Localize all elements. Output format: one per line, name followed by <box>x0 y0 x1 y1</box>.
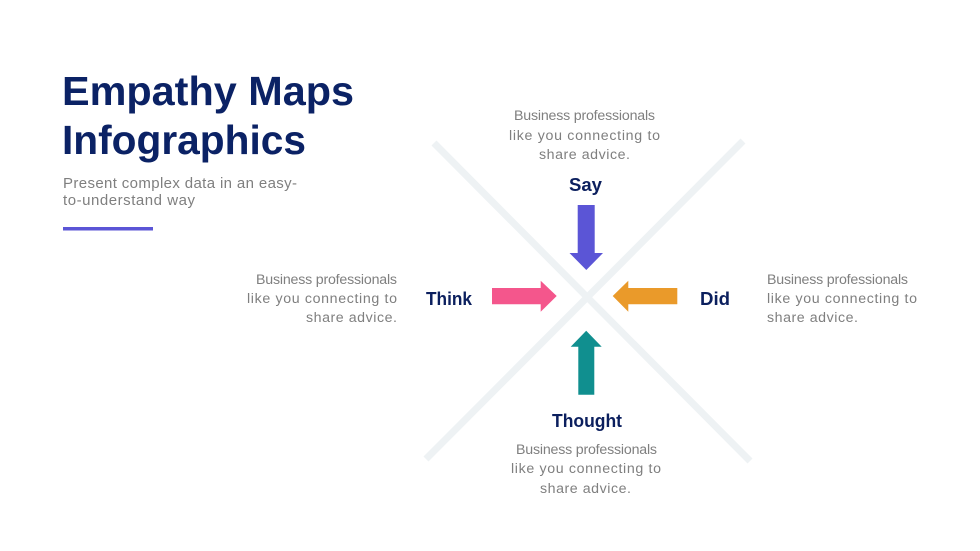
text block: did: like you connecting to <box>767 291 917 307</box>
label: say: Say <box>569 175 602 195</box>
text block: say: Business professionals <box>514 108 655 124</box>
title: Infographics <box>62 117 306 163</box>
subtitle <box>63 175 297 209</box>
text block: thought: share advice. <box>540 481 631 497</box>
arrow: thought <box>571 331 602 395</box>
text block: thought <box>511 442 661 497</box>
text block: did: Business professionals <box>767 272 908 288</box>
title underline <box>63 227 153 230</box>
text block: think <box>247 272 397 326</box>
arrow: say <box>570 205 603 270</box>
text block: think: Business professionals <box>256 272 397 288</box>
text block: thought: like you connecting to <box>511 461 661 477</box>
text block: say: like you connecting to <box>509 128 660 144</box>
text block: say: share advice. <box>539 147 630 163</box>
title: Empathy Maps <box>62 68 354 114</box>
arrow: think <box>492 281 557 312</box>
diagonal cross <box>426 141 750 461</box>
text block: think: like you connecting to <box>247 291 397 307</box>
text block: think: share advice. <box>306 310 397 326</box>
text block: did <box>767 272 917 326</box>
subtitle: Present complex data in an easy- <box>63 175 297 192</box>
title <box>62 68 354 163</box>
arrow: did <box>613 281 677 312</box>
subtitle: to-understand way <box>63 192 196 209</box>
text block: thought: Business professionals <box>516 442 657 458</box>
label: did: Did <box>700 289 730 309</box>
text block: did: share advice. <box>767 310 858 326</box>
label: think: Think <box>426 289 473 309</box>
label: thought: Thought <box>552 411 622 431</box>
text block: say <box>509 108 660 163</box>
